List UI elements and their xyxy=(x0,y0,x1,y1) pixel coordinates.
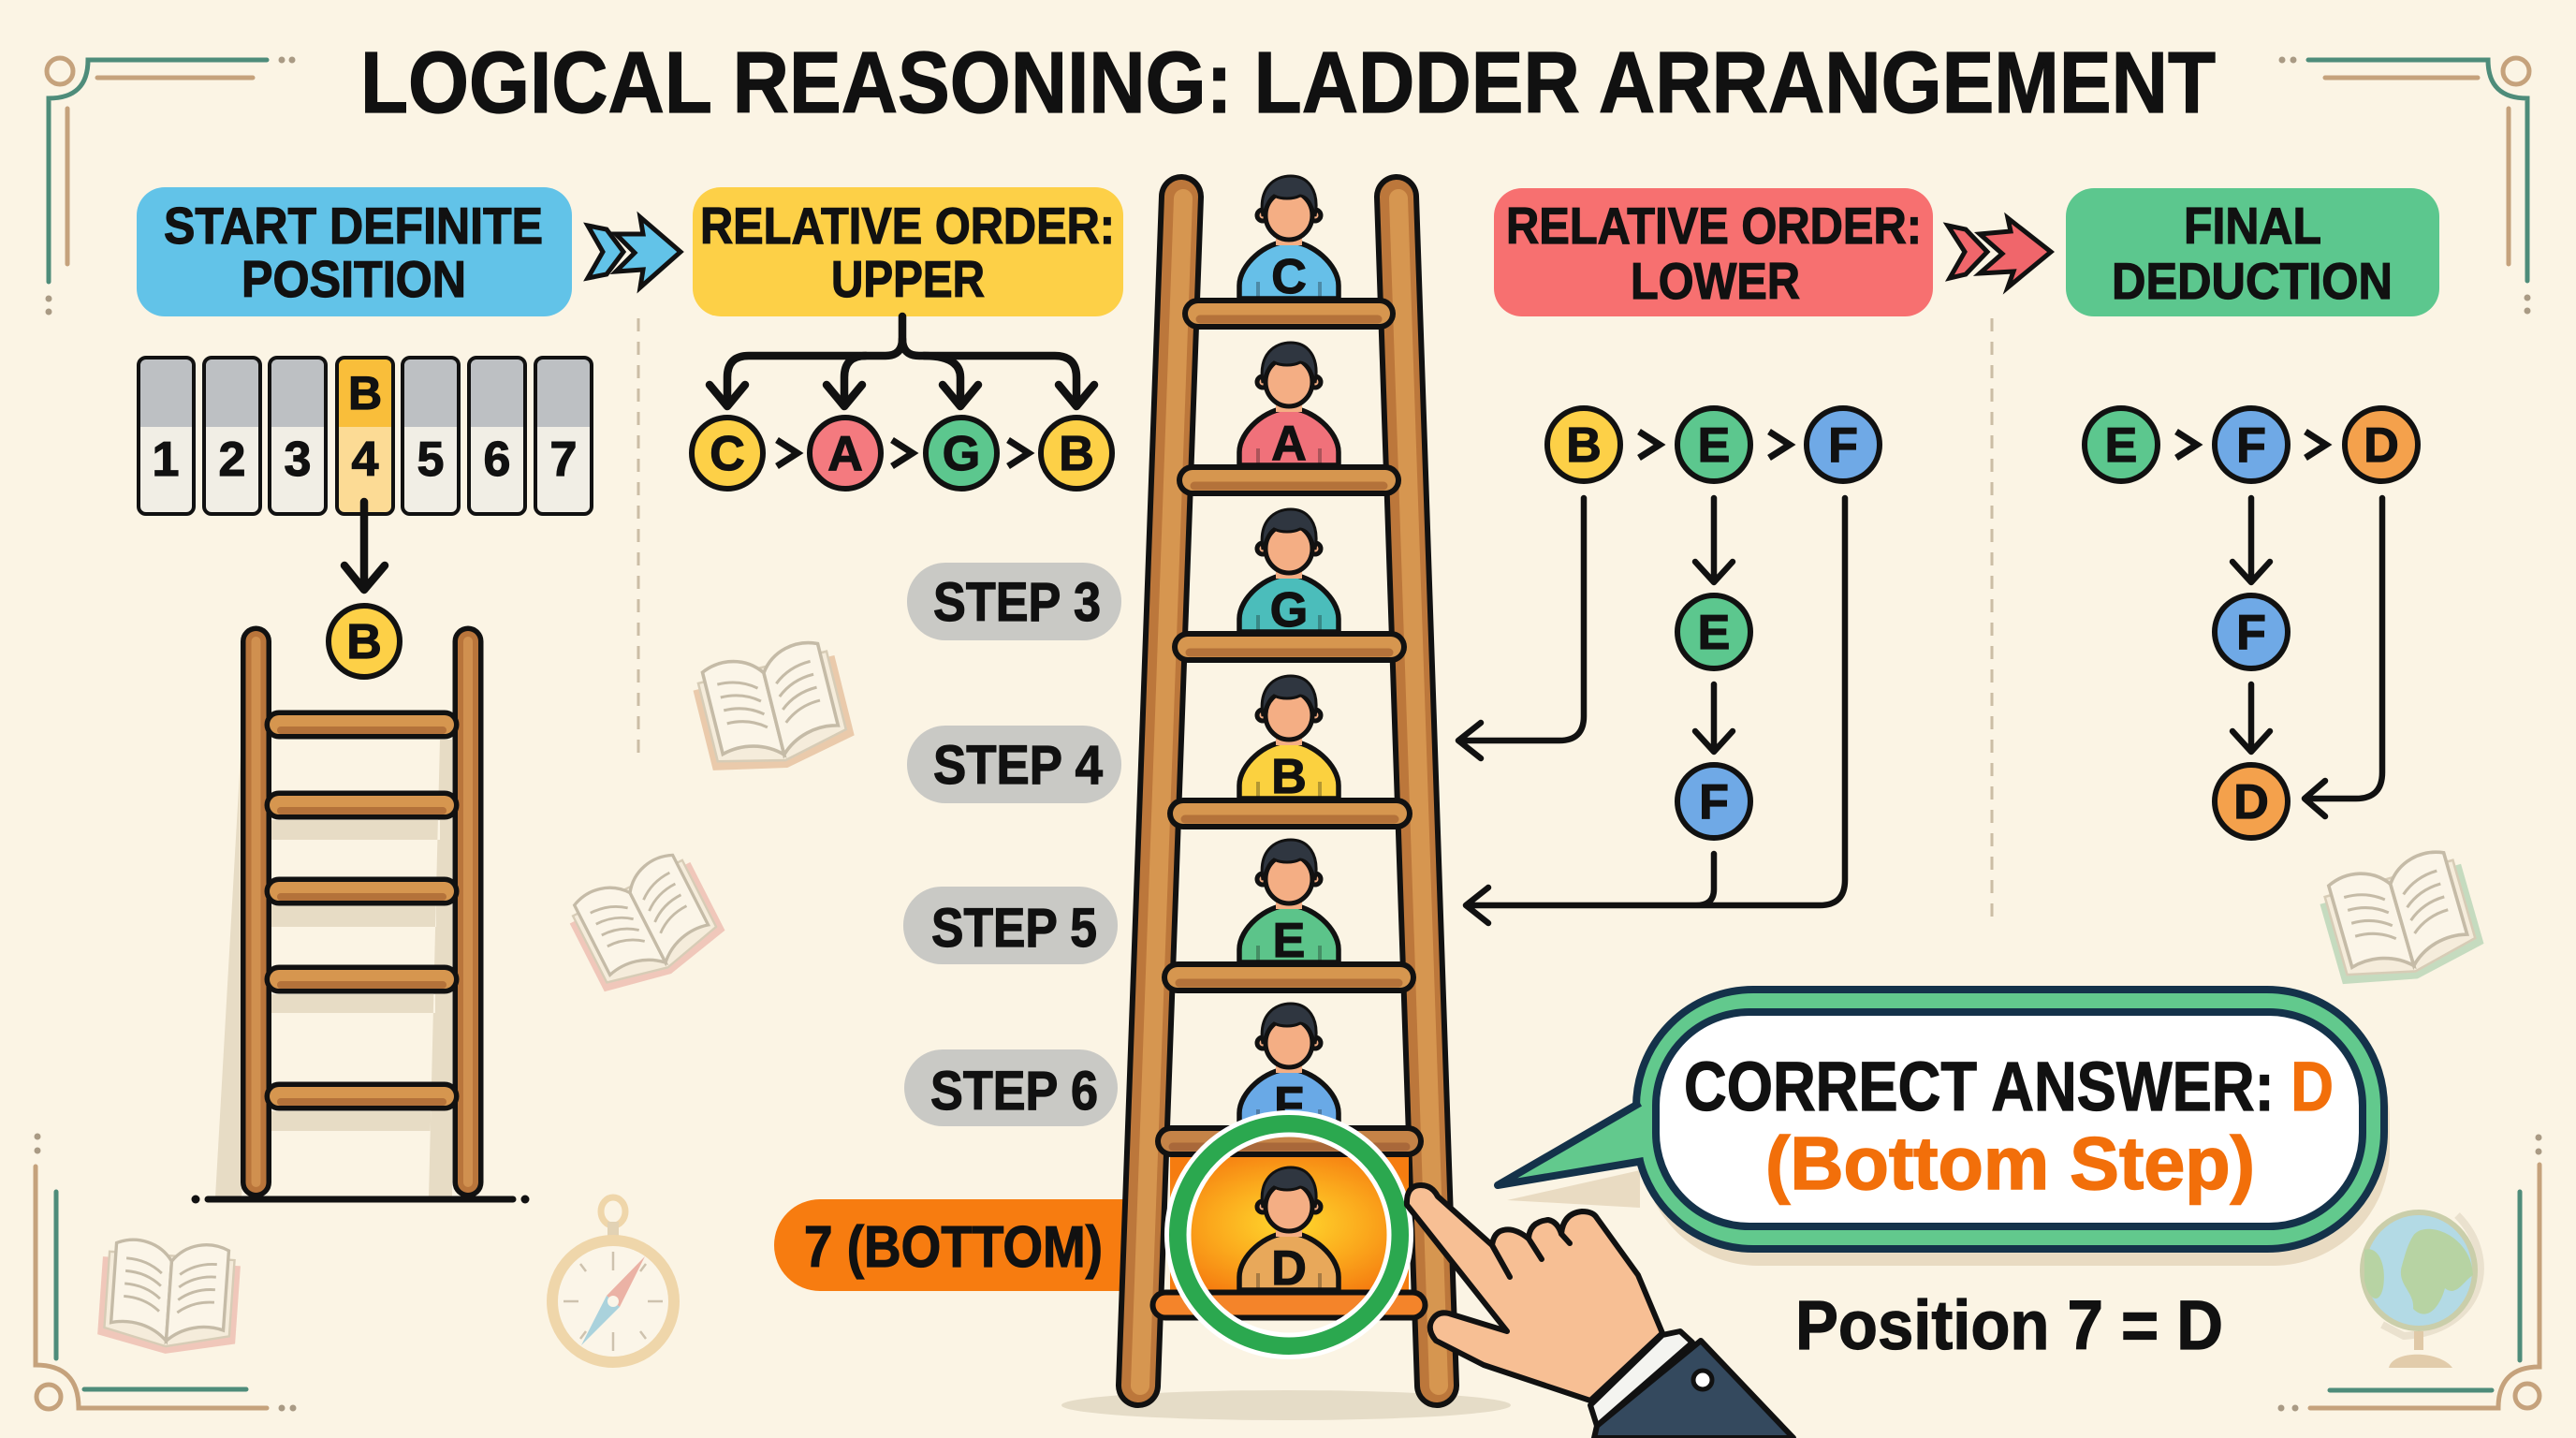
title: LOGICAL REASONING: LADDER ARRANGEMENT xyxy=(360,34,2216,131)
person C xyxy=(1239,176,1339,304)
chain B > E > F xyxy=(1547,408,1880,481)
badge F: F xyxy=(2236,606,2266,660)
person G xyxy=(1239,509,1339,638)
dashed divider right xyxy=(1990,318,1994,920)
arrow: E down to F xyxy=(1695,684,1733,752)
person B: B xyxy=(1271,750,1307,804)
step 5 pill xyxy=(903,887,1118,964)
chain B > E > F: F xyxy=(1828,418,1858,473)
decorative corner: top left xyxy=(45,56,296,315)
heading box red xyxy=(1494,188,1933,316)
chain E > F > D: E xyxy=(2105,418,2137,473)
icon: faded book, bottom left xyxy=(96,1238,242,1358)
step 4 pill xyxy=(907,726,1121,803)
icon: pointing hand xyxy=(1407,1185,1793,1438)
person F xyxy=(1239,1004,1339,1132)
arrow: F down to F xyxy=(2232,498,2270,582)
callout: correct answer xyxy=(1498,990,2390,1266)
position 7 bottom pill xyxy=(774,1199,1137,1291)
chain B > E > F: E xyxy=(1698,418,1730,473)
answer text line 2: (Bottom Step) xyxy=(1765,1122,2255,1205)
badge B: B xyxy=(346,615,382,669)
heading box green: DEDUCTION xyxy=(2112,252,2393,310)
arrow: red chevron xyxy=(1948,218,2051,287)
person D xyxy=(1239,1167,1339,1296)
heading box blue: POSITION xyxy=(242,250,466,308)
person D: D xyxy=(1271,1241,1307,1296)
badge E xyxy=(1677,595,1750,668)
person B xyxy=(1239,676,1339,804)
heading box yellow xyxy=(693,187,1123,316)
icon: faded compass xyxy=(552,1197,674,1362)
highlight ring around D xyxy=(1167,1113,1411,1357)
answer text line 1: CORRECT ANSWER: D xyxy=(1684,1048,2334,1125)
arrow: D around to D xyxy=(2305,498,2382,816)
chain C > A > G > B: C xyxy=(710,427,745,481)
arrow: slot 4 to ladder xyxy=(344,502,385,590)
step 3 pill xyxy=(907,563,1121,640)
chain B > E > F: B xyxy=(1566,418,1602,473)
position slots 1 to 7: 4 xyxy=(352,433,379,487)
position slots 1 to 7: B xyxy=(348,367,382,419)
decorative corner: bottom right xyxy=(2278,1135,2542,1412)
heading box green xyxy=(2066,188,2439,316)
chain C > A > G > B: A xyxy=(827,427,863,481)
person E: E xyxy=(1273,914,1305,968)
icon: faded globe xyxy=(2363,1212,2481,1368)
highlight glow behind D xyxy=(1170,1157,1409,1290)
arrow: F to ladder step 5 xyxy=(1466,498,1845,923)
position slots 1 to 7: 7 xyxy=(550,433,577,487)
badge F: F xyxy=(1699,775,1729,829)
position slots 1 to 7: 1 xyxy=(153,433,179,487)
dashed divider left xyxy=(637,318,640,756)
heading box red: RELATIVE ORDER: xyxy=(1506,197,1922,255)
ground shadow xyxy=(1061,1390,1511,1420)
icon: faded book, upper middle xyxy=(688,636,858,785)
branching arrows xyxy=(710,316,1094,406)
position slots 1 to 7: 3 xyxy=(285,433,311,487)
person C: C xyxy=(1271,250,1307,304)
chain C > A > G > B xyxy=(692,418,1112,489)
person G: G xyxy=(1270,583,1308,638)
position slots 1 to 7: 5 xyxy=(417,433,444,487)
panel: final deduction xyxy=(2066,188,2439,838)
person F: F xyxy=(1274,1078,1304,1132)
badge F xyxy=(2215,595,2288,668)
position 7 = D text: Position 7 = D xyxy=(1795,1286,2223,1364)
step labels xyxy=(774,563,1137,1291)
position slots 1 to 7 xyxy=(139,358,592,514)
arrow: B to ladder step 4 xyxy=(1458,498,1584,758)
panel: relative order upper xyxy=(692,187,1123,489)
chain C > A > G > B: B xyxy=(1059,427,1094,481)
right rail xyxy=(1397,197,1439,1386)
arrow: blue chevron xyxy=(588,217,681,287)
person A xyxy=(1239,343,1339,471)
heading box yellow: UPPER xyxy=(831,250,985,308)
left rail xyxy=(1138,197,1183,1386)
step 6 pill: STEP 6 xyxy=(930,1061,1098,1122)
badge E: E xyxy=(1698,606,1730,660)
heading box red: LOWER xyxy=(1631,252,1800,310)
heading box blue: START DEFINITE xyxy=(164,197,543,255)
badge D xyxy=(2215,765,2288,838)
icon: faded book, right xyxy=(2315,844,2488,999)
badge F xyxy=(1677,765,1750,838)
heading box yellow: RELATIVE ORDER: xyxy=(700,197,1115,255)
heading box green: FINAL xyxy=(2184,197,2321,255)
arrow: E down to E xyxy=(1695,498,1733,582)
ladder rungs xyxy=(1165,314,1412,1305)
badge D: D xyxy=(2233,775,2269,829)
chain C > A > G > B: G xyxy=(943,427,980,481)
step 4 pill: STEP 4 xyxy=(933,735,1103,796)
person A: A xyxy=(1271,417,1307,471)
badge B xyxy=(329,606,400,677)
panel: start definite position xyxy=(137,187,592,1204)
step 3 pill: STEP 3 xyxy=(933,572,1101,633)
heading box blue xyxy=(137,187,572,316)
main ladder xyxy=(1061,176,1511,1420)
position slots 1 to 7: 2 xyxy=(219,433,245,487)
step 5 pill: STEP 5 xyxy=(931,898,1097,959)
arrow: F down to D xyxy=(2232,684,2270,752)
chain E > F > D: D xyxy=(2364,418,2399,473)
chain E > F > D xyxy=(2085,408,2418,481)
decorative corner: top right xyxy=(2278,56,2531,315)
panel: relative order lower xyxy=(1458,188,1933,923)
chain E > F > D: F xyxy=(2236,418,2266,473)
small ladder xyxy=(191,641,530,1204)
icon: faded book, left middle xyxy=(562,845,731,1005)
position 7 bottom pill: 7 (BOTTOM) xyxy=(804,1215,1103,1280)
decorative corner: bottom left xyxy=(34,1133,296,1412)
step 6 pill xyxy=(904,1049,1118,1126)
position slots 1 to 7: 6 xyxy=(484,433,510,487)
person E xyxy=(1239,840,1339,968)
